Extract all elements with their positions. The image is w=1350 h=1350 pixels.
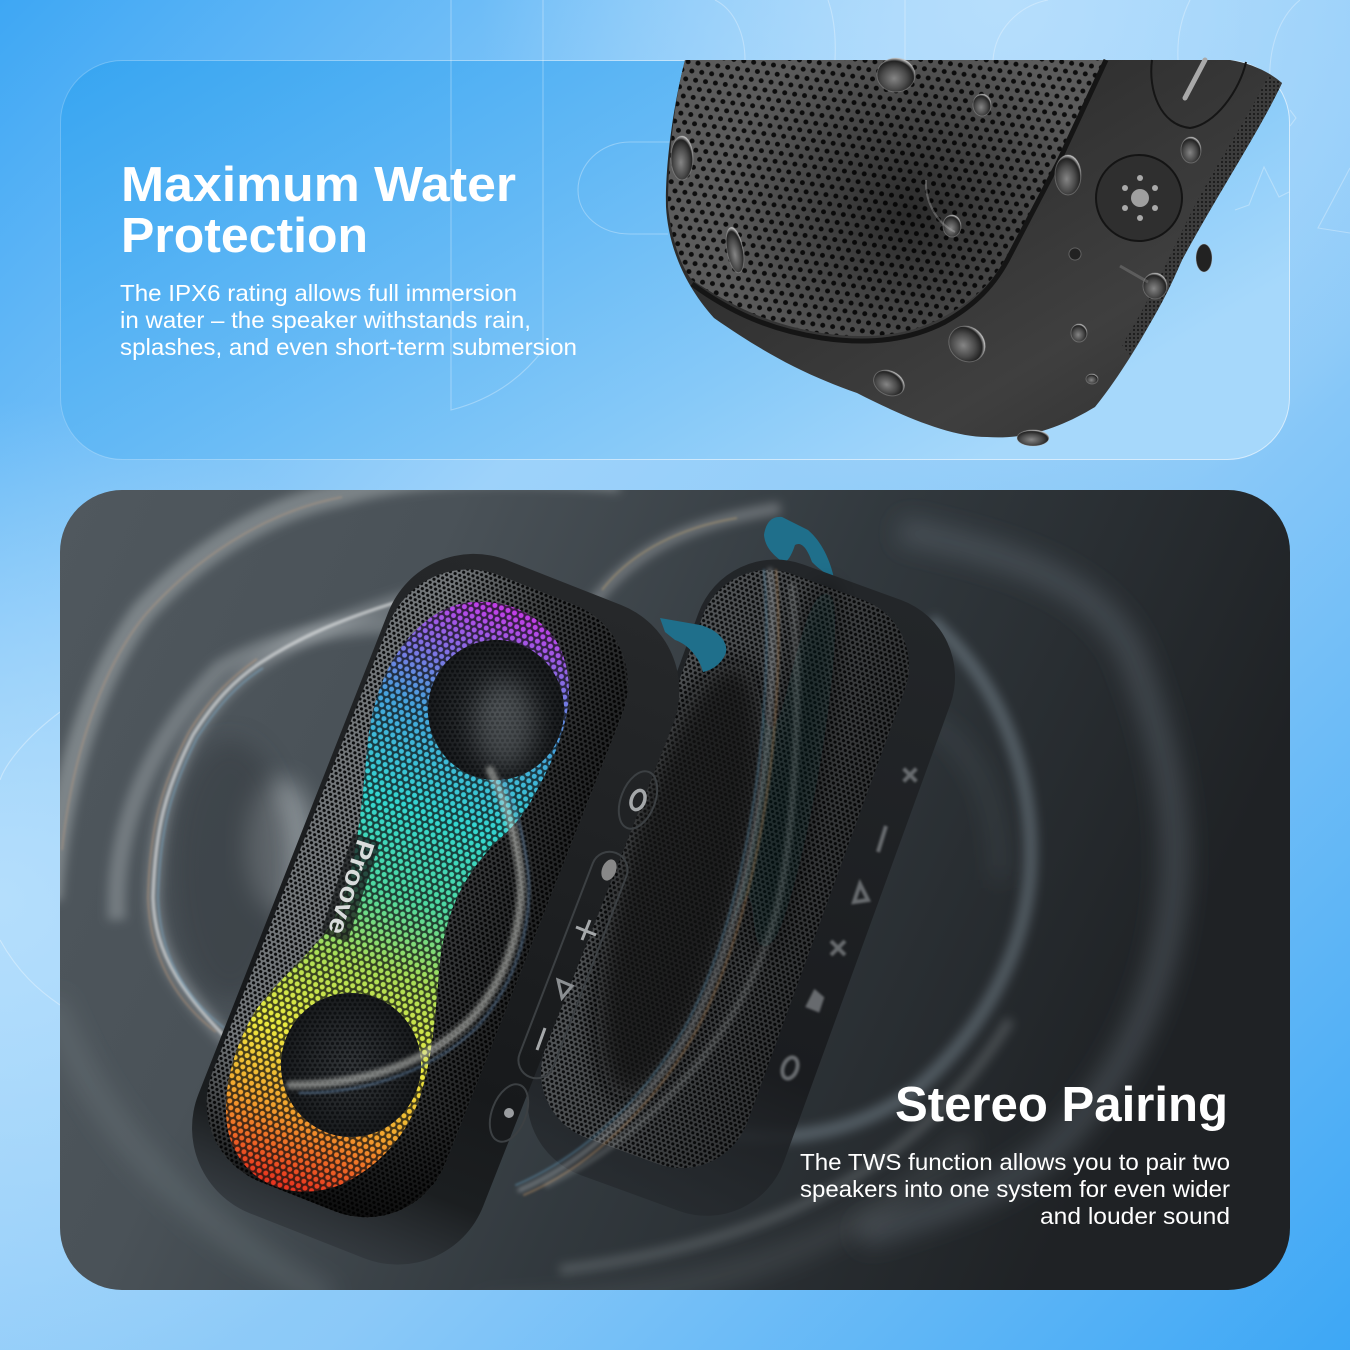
side buttons right xyxy=(780,762,923,1081)
left speaker xyxy=(192,554,726,1264)
rainbow dark base xyxy=(226,602,569,1192)
text: water protection description: The IPX6 rating allows full immersion xyxy=(120,280,517,306)
heading: maximum water protection: Maximum Water xyxy=(121,158,516,212)
heading: maximum water protection xyxy=(121,158,516,263)
speaker body xyxy=(666,60,1282,437)
grille shading xyxy=(668,60,1104,336)
decorative outlines beside dark panel xyxy=(0,712,60,1005)
speaker holes xyxy=(281,640,564,1137)
heading: stereo pairing: Stereo Pairing xyxy=(895,1078,1228,1132)
panel: water protection xyxy=(60,0,1350,460)
grille bottom shading xyxy=(206,1044,446,1218)
text: stereo pairing description xyxy=(800,1149,1230,1229)
grille left xyxy=(206,570,628,1218)
sound wave overlay arcs xyxy=(290,570,797,1195)
body left xyxy=(192,554,680,1264)
grille right xyxy=(541,570,909,1168)
textured side band xyxy=(1122,76,1282,355)
rainbow glow xyxy=(226,602,569,1192)
right speaker xyxy=(528,516,955,1214)
speaker grille xyxy=(668,60,1104,336)
carrying strap right xyxy=(764,517,834,578)
body right xyxy=(528,560,955,1214)
text: water protection description xyxy=(120,280,577,360)
grille shading left xyxy=(259,570,628,1218)
text: water protection description: splashes, and even short-term submersion xyxy=(120,334,577,360)
grille shading right xyxy=(541,570,909,1168)
rainbow led dots xyxy=(226,602,569,1192)
water droplets xyxy=(671,58,1212,446)
shading right xyxy=(584,586,843,1106)
side buttons left xyxy=(482,766,665,1147)
grille rim xyxy=(692,60,1106,341)
text: water protection description: in water – the speaker withstands rain, xyxy=(120,307,531,333)
panel: stereo pairing xyxy=(50,474,1290,1310)
button: light xyxy=(1096,155,1182,241)
text: stereo pairing description: The TWS function allows you to pair two xyxy=(800,1149,1230,1175)
heading: maximum water protection: Protection xyxy=(121,209,368,263)
button: volume pill xyxy=(1151,60,1246,128)
text: stereo pairing description: speakers into one system for even wider xyxy=(800,1176,1230,1202)
carrying strap left xyxy=(660,618,726,672)
sound wave rings xyxy=(50,474,1175,1310)
photo: wet speaker close-up xyxy=(666,58,1282,446)
text: stereo pairing description: and louder sound xyxy=(1040,1203,1230,1229)
brand logo: Proove xyxy=(322,836,381,939)
